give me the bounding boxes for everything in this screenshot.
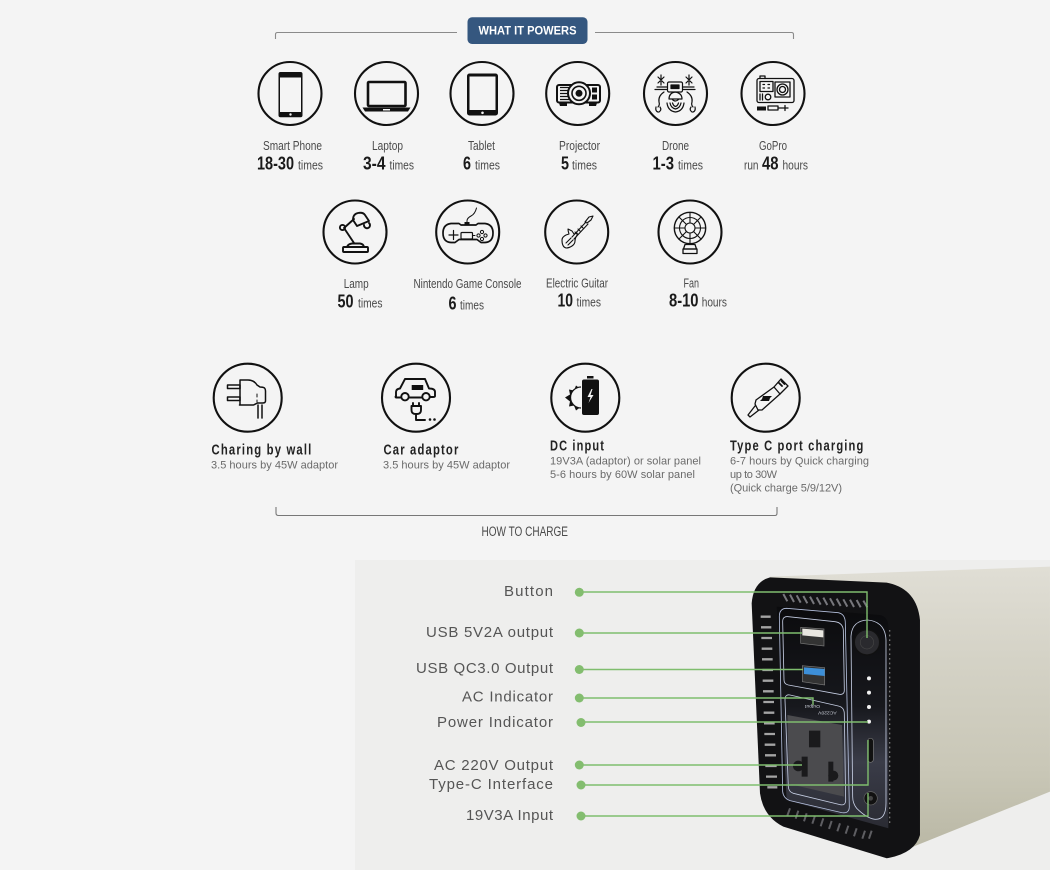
item: electric guitar bbox=[545, 200, 608, 310]
item: tablet: 6 bbox=[463, 154, 471, 174]
item: nintendo game console: Nintendo Game Console bbox=[414, 277, 522, 291]
title badge: what it powers bbox=[276, 17, 794, 44]
item: electric guitar: Electric Guitar bbox=[546, 276, 608, 290]
item: laptop: Laptop bbox=[372, 139, 403, 153]
item: smart phone: times bbox=[298, 158, 323, 172]
usb-c and dc ports bbox=[868, 738, 873, 762]
item: projector: Projector bbox=[559, 139, 600, 153]
charging: dc input: DC input bbox=[550, 439, 605, 455]
item: lamp: Lamp bbox=[344, 277, 369, 291]
port labels: AC Indicator bbox=[462, 688, 553, 706]
charging: wall bbox=[211, 364, 338, 472]
how to charge bracket and caption: HOW TO CHARGE bbox=[482, 524, 568, 539]
product photo: power station: AC220V bbox=[817, 709, 837, 715]
port labels: USB 5V2A output bbox=[426, 624, 554, 641]
item: gopro: GoPro bbox=[759, 139, 787, 153]
charging: car adaptor bbox=[382, 364, 510, 472]
title badge: what it powers: WHAT IT POWERS bbox=[478, 24, 576, 38]
item: fan: 8-10 bbox=[669, 290, 698, 310]
item: nintendo game console bbox=[414, 200, 522, 314]
item: tablet: times bbox=[475, 158, 500, 172]
item: laptop: times bbox=[390, 158, 414, 172]
item: projector: times bbox=[572, 158, 597, 172]
item: drone: times bbox=[678, 158, 703, 172]
item: smart phone: 18-30 bbox=[257, 154, 294, 174]
ac socket bbox=[787, 715, 844, 797]
product photo: power station: Output bbox=[804, 703, 820, 709]
how to charge bracket and caption bbox=[276, 507, 777, 539]
port labels: Type-C Interface bbox=[429, 776, 553, 793]
charging: dc input: 19V3A (adaptor) or solar panel bbox=[550, 456, 701, 468]
port labels bbox=[416, 583, 554, 824]
item: projector bbox=[546, 62, 609, 174]
item: lamp: 50 bbox=[338, 292, 354, 312]
item: gopro: run bbox=[744, 158, 759, 172]
item: lamp: times bbox=[358, 296, 382, 310]
charging: wall: Charing by wall bbox=[212, 442, 312, 458]
item: fan: hours bbox=[702, 296, 727, 310]
item: projector: 5 bbox=[561, 154, 569, 174]
leader dots bbox=[575, 588, 586, 820]
item: laptop: 3-4 bbox=[363, 154, 386, 174]
item: gopro: hours bbox=[782, 158, 808, 172]
charging: type c port bbox=[730, 364, 869, 495]
indicators bbox=[867, 676, 871, 680]
item: electric guitar: times bbox=[576, 296, 601, 310]
charging: car adaptor: Car adaptor bbox=[384, 442, 460, 458]
vents bbox=[761, 617, 777, 787]
panel: product port diagram bbox=[355, 560, 1050, 870]
charging: car adaptor: 3.5 hours by 45W adaptor bbox=[383, 460, 510, 472]
product photo: power station bbox=[752, 567, 1050, 858]
leader lines bbox=[579, 592, 868, 816]
item: smart phone: Smart Phone bbox=[263, 139, 322, 153]
item: drone bbox=[644, 62, 707, 174]
item: fan: Fan bbox=[684, 276, 699, 290]
item: lamp bbox=[324, 200, 386, 312]
item: laptop bbox=[355, 62, 418, 174]
port labels: Button bbox=[504, 583, 553, 600]
port labels: Power Indicator bbox=[437, 714, 553, 731]
charging: type c port: 6-7 hours by Quick charging bbox=[730, 456, 869, 468]
item: nintendo game console: 6 bbox=[448, 294, 456, 314]
power button bbox=[854, 630, 880, 655]
port labels: 19V3A Input bbox=[466, 807, 554, 824]
port labels: USB QC3.0 Output bbox=[416, 660, 554, 677]
item: gopro: 48 bbox=[762, 154, 778, 174]
item: drone: Drone bbox=[662, 139, 689, 153]
item: nintendo game console: times bbox=[460, 298, 484, 312]
item: drone: 1-3 bbox=[652, 154, 674, 174]
item: electric guitar: 10 bbox=[558, 290, 573, 310]
charging: wall: 3.5 hours by 45W adaptor bbox=[211, 460, 338, 472]
port labels: AC 220V Output bbox=[434, 757, 554, 774]
item: fan bbox=[658, 200, 727, 310]
front faceplate bbox=[777, 607, 888, 828]
charging: dc input: 5-6 hours by 60W solar panel bbox=[550, 469, 695, 481]
item: gopro bbox=[742, 62, 808, 174]
item: tablet bbox=[450, 62, 514, 174]
usb ports bbox=[801, 627, 824, 646]
item: tablet: Tablet bbox=[468, 139, 495, 153]
charging: dc input bbox=[550, 364, 701, 481]
charging: type c port: Type C port charging bbox=[730, 439, 864, 455]
charging: type c port: up to 30W bbox=[730, 469, 778, 481]
charging: type c port: (Quick charge 5/9/12V) bbox=[730, 483, 842, 495]
item: smart phone bbox=[257, 62, 323, 174]
